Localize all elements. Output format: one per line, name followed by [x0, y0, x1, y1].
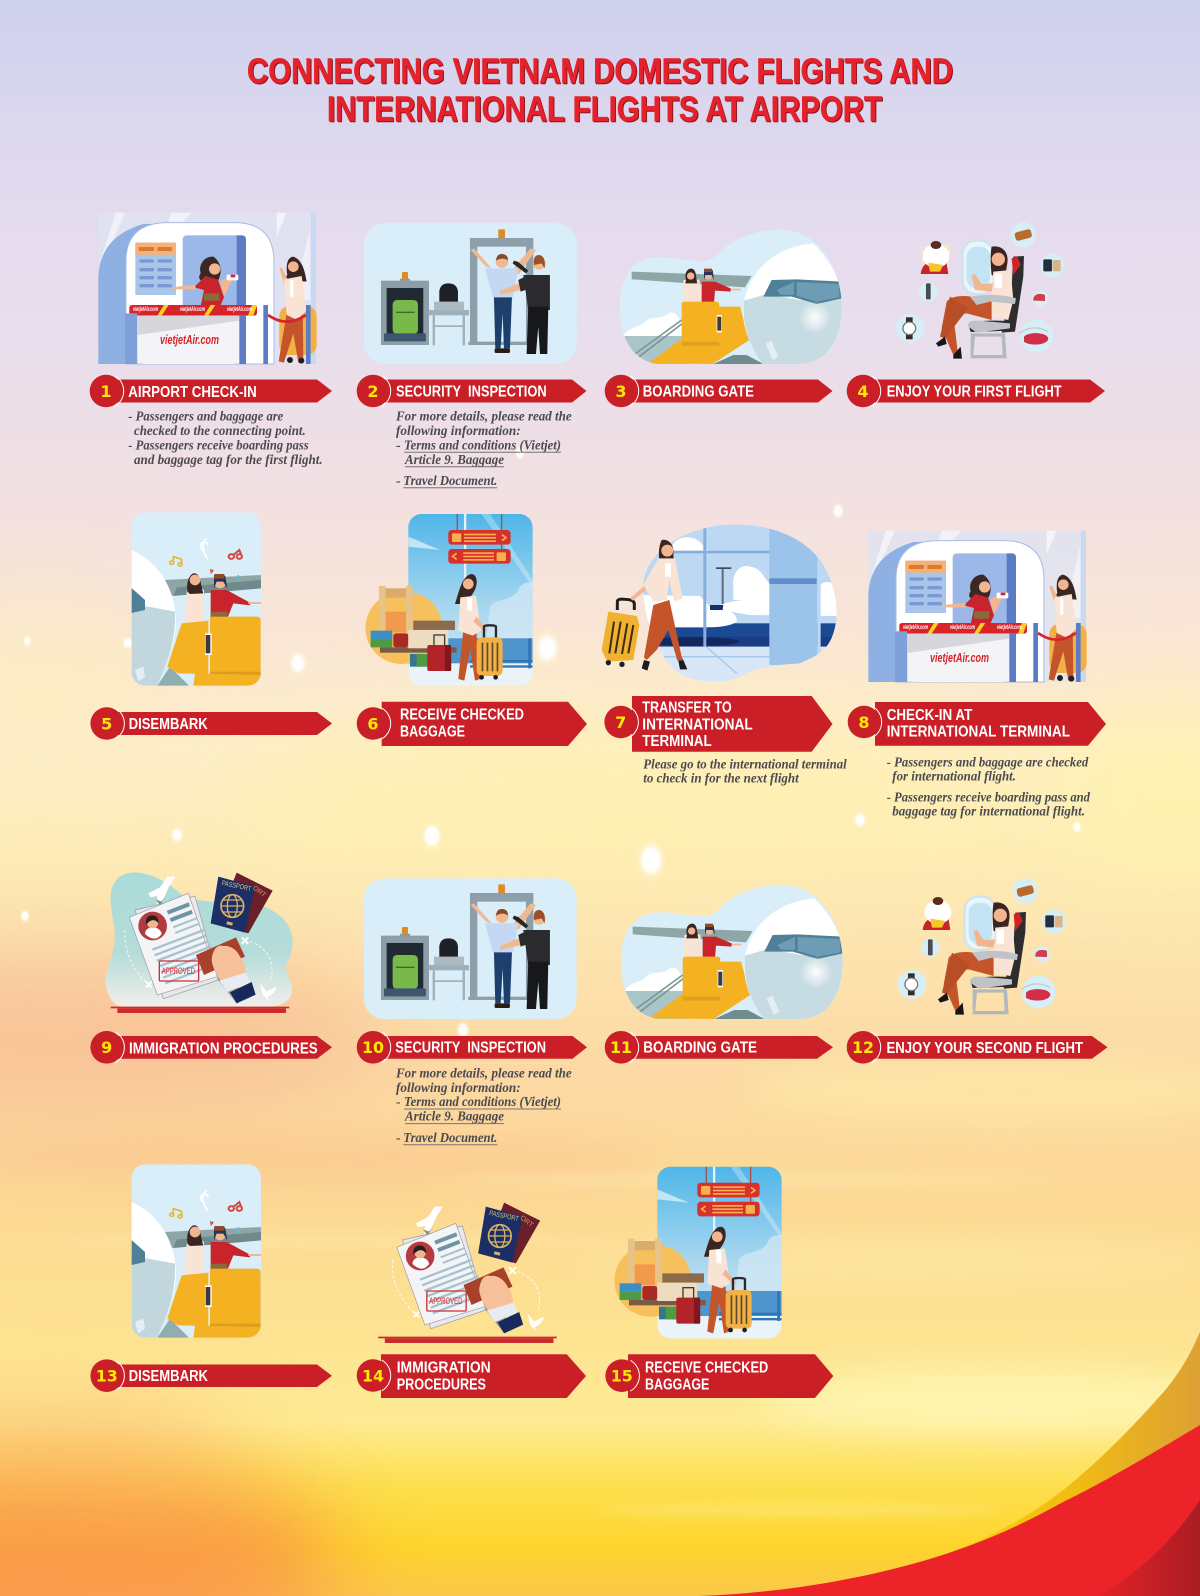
- illustration: disembark: [130, 1164, 262, 1339]
- description 10: Article 9. Baggage: [404, 1110, 504, 1125]
- ribbon 3: [605, 375, 832, 407]
- illustration: passport and stamp: ORT: [518, 1215, 535, 1230]
- ribbon 8: INTERNATIONAL TERMINAL: [887, 724, 1070, 741]
- description 10: For more details, please read the: [395, 1066, 572, 1081]
- description 10: -: [396, 1095, 401, 1110]
- description 2: Travel Document.: [403, 474, 497, 489]
- step 14: immigration procedures: [357, 1203, 586, 1398]
- description 2: -: [396, 438, 401, 453]
- illustration: baggage claim: [614, 1167, 782, 1339]
- ribbon 11: 11: [610, 1038, 632, 1057]
- ribbon 7: TERMINAL: [642, 733, 712, 750]
- illustration: woman in plane seat: [898, 878, 1066, 1015]
- ribbon 6: [357, 702, 587, 746]
- ribbon 7: TRANSFER TO: [642, 699, 732, 716]
- step 4: enjoy your first flight: [847, 222, 1105, 407]
- illustration: international check-in counter: vietjetAir.com: [903, 625, 928, 631]
- description 1: - Passengers and baggage are: [128, 410, 283, 425]
- description 8: for international flight.: [892, 770, 1016, 785]
- description 8: baggage tag for international flight.: [892, 805, 1085, 820]
- description 2: following information:: [396, 424, 521, 439]
- ribbon 11: BOARDING GATE: [643, 1040, 757, 1057]
- ribbon 15: RECEIVE CHECKED: [645, 1360, 768, 1377]
- illustration: security gate: [364, 223, 577, 364]
- description 2: Terms and conditions (Vietjet): [404, 438, 561, 453]
- ribbon 12: [847, 1031, 1108, 1064]
- ribbon 13: 13: [96, 1366, 118, 1386]
- ribbon 14: IMMIGRATION: [397, 1360, 491, 1377]
- title: CONNECTING VIETNAM DOMESTIC FLIGHTS AND: [247, 52, 953, 91]
- ribbon 14: 14: [362, 1366, 384, 1386]
- ribbon 8: 8: [858, 713, 870, 732]
- ribbon 3: 3: [615, 382, 627, 401]
- ribbon 15: 15: [611, 1366, 633, 1386]
- ribbon 6: BAGGAGE: [400, 724, 465, 741]
- description 10: [395, 1066, 572, 1146]
- description 8: [887, 756, 1091, 820]
- ribbon 7: [604, 696, 832, 752]
- corner swoosh: gold, red, dark red: [700, 1332, 1200, 1596]
- step 8: check-in at international terminal: [848, 531, 1106, 820]
- ribbon 11: [605, 1031, 833, 1064]
- ribbon 2: 2: [367, 382, 379, 401]
- ribbon 6: RECEIVE CHECKED: [400, 706, 524, 723]
- step 12: enjoy your second flight: [847, 878, 1108, 1064]
- description 7: Please go to the international terminal: [643, 757, 847, 772]
- ribbon 9: 9: [101, 1038, 112, 1057]
- ribbon 4: [847, 375, 1105, 407]
- ribbon 7: 7: [615, 713, 626, 732]
- illustration: passport and stamp on teal blob: [106, 872, 293, 1013]
- ribbon 1: 1: [100, 382, 112, 401]
- step 13: disembark: [90, 1164, 332, 1392]
- description 2: For more details, please read the: [395, 410, 572, 425]
- illustration: boarding stairs and plane: [617, 227, 847, 367]
- description 1: and baggage tag for the first flight.: [134, 453, 323, 468]
- illustration: international check-in counter: vietjetAir.com: [950, 625, 975, 631]
- ribbon 12: 12: [852, 1038, 874, 1057]
- illustration: passport and stamp: PASSPORT: [488, 1210, 520, 1223]
- description 2: [395, 410, 572, 489]
- illustration: check-in counter: vietjetAir.com: [227, 307, 252, 313]
- description 2: -: [396, 474, 401, 489]
- ribbon 10: [357, 1031, 587, 1064]
- illustration: check-in counter: vietjetAir.com: [160, 332, 219, 347]
- title: [247, 52, 953, 129]
- ribbon 3: BOARDING GATE: [643, 384, 754, 400]
- ribbon 14: PROCEDURES: [397, 1376, 486, 1393]
- illustration: passport and stamp: [378, 1203, 557, 1343]
- ribbon 5: 5: [101, 714, 112, 734]
- description 8: - Passengers and baggage are checked: [887, 756, 1089, 771]
- ribbon 15: [605, 1354, 833, 1398]
- illustration: woman walking in terminal: [602, 520, 840, 687]
- illustration: passport and stamp on teal blob: ORT: [251, 885, 267, 900]
- illustration: passport and stamp on teal blob: PASSPORT: [221, 880, 252, 893]
- ribbon 1: [90, 375, 332, 407]
- ribbon 9: IMMIGRATION PROCEDURES: [129, 1040, 318, 1057]
- ribbon 4: 4: [857, 382, 869, 401]
- step 1: airport check-in: [90, 213, 332, 468]
- ribbon 15: BAGGAGE: [645, 1376, 710, 1393]
- step 2: security inspection: [357, 223, 586, 489]
- description 7: [643, 757, 847, 787]
- ribbon 12: ENJOY YOUR SECOND FLIGHT: [886, 1040, 1083, 1057]
- description 10: Travel Document.: [403, 1131, 497, 1146]
- illustration: check-in counter: vietjetAir.com: [180, 307, 205, 313]
- description 2: Article 9. Baggage: [404, 453, 504, 468]
- step 10: security inspection: [357, 878, 587, 1146]
- ribbon 8: CHECK-IN AT: [887, 707, 972, 724]
- ribbon 1: AIRPORT CHECK-IN: [128, 384, 257, 401]
- step 9: immigration procedures: [90, 872, 332, 1064]
- illustration: disembark: [130, 512, 262, 687]
- step 5: disembark: [90, 512, 332, 740]
- illustration: passport and stamp: APPROVED: [429, 1296, 463, 1306]
- step 3: boarding gate: [605, 227, 847, 407]
- step 11: boarding gate: [605, 882, 848, 1064]
- description 10: -: [396, 1131, 401, 1146]
- illustration: security gate: [364, 878, 577, 1019]
- description 10: Terms and conditions (Vietjet): [404, 1095, 561, 1110]
- bokeh light spots: [19, 444, 1083, 1041]
- ribbon 5: DISEMBARK: [129, 716, 208, 733]
- step 6: receive checked baggage: [357, 514, 587, 746]
- description 1: - Passengers receive boarding pass: [128, 438, 309, 453]
- description 1: checked to the connecting point.: [134, 424, 306, 439]
- title: INTERNATIONAL FLIGHTS AT AIRPORT: [327, 90, 882, 129]
- illustration: woman in plane seat: [896, 222, 1064, 359]
- ribbon 8: [848, 702, 1106, 746]
- ribbon 5: [90, 707, 332, 740]
- ribbon 2: SECURITY INSPECTION: [396, 384, 547, 400]
- step 7: transfer to international terminal: [602, 520, 847, 787]
- illustration: passport and stamp on teal blob: APPROVED: [162, 966, 195, 976]
- illustration: baggage claim: [365, 514, 533, 687]
- ribbon 13: [90, 1359, 332, 1392]
- illustration: international check-in counter: vietjetAir.com: [930, 650, 989, 665]
- illustration: international check-in counter: [868, 531, 1087, 682]
- description 10: following information:: [396, 1081, 521, 1096]
- ribbon 4: ENJOY YOUR FIRST FLIGHT: [887, 384, 1062, 400]
- illustration: boarding stairs and plane: [618, 882, 848, 1022]
- ribbon 9: [90, 1031, 332, 1064]
- description 7: to check in for the next flight: [643, 772, 800, 787]
- description 8: - Passengers receive boarding pass and: [887, 790, 1091, 805]
- ribbon 13: DISEMBARK: [129, 1368, 208, 1385]
- illustration: international check-in counter: vietjetAir.com: [997, 625, 1022, 631]
- ribbon 7: INTERNATIONAL: [642, 716, 753, 733]
- ribbon 10: 10: [362, 1038, 384, 1057]
- ribbon 10: SECURITY INSPECTION: [395, 1040, 546, 1057]
- description 1: [128, 410, 323, 468]
- illustration: check-in counter: [98, 213, 317, 364]
- ribbon 6: 6: [367, 714, 379, 734]
- illustration: check-in counter: vietjetAir.com: [133, 307, 158, 313]
- step 15: receive checked baggage: [605, 1167, 833, 1398]
- ribbon 14: [357, 1354, 586, 1398]
- ribbon 2: [357, 375, 586, 407]
